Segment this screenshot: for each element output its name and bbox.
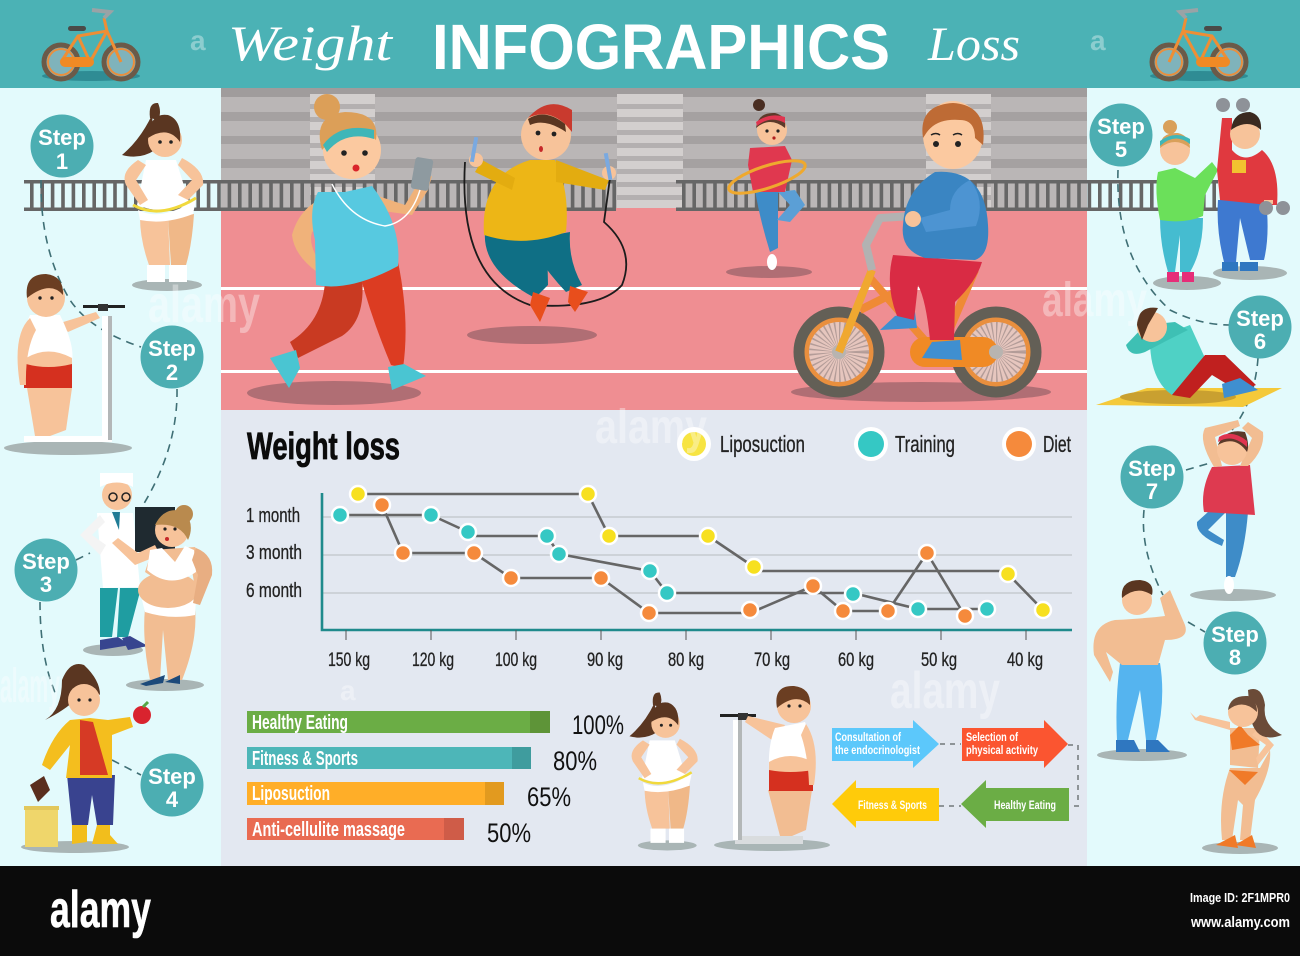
chart x-axis labels: 90 kg	[587, 650, 623, 671]
bar: fitness and sports: Fitness & Sports	[252, 748, 358, 770]
chart x-axis labels: 80 kg	[668, 650, 704, 671]
step 4 badge	[140, 754, 204, 816]
figure: man doing sit-ups	[1096, 308, 1282, 407]
running track	[221, 208, 1087, 410]
bar: fitness and sports: 80%	[553, 746, 597, 776]
chart legend: Liposuction	[720, 431, 805, 457]
header band	[0, 0, 1300, 88]
arrow: selection of physical activity: physical activity	[966, 743, 1038, 757]
line chart: weight over time	[322, 486, 1072, 640]
left side panel	[0, 88, 221, 866]
stock watermarks: alamy	[595, 401, 707, 454]
title: Weight: Weight	[228, 15, 393, 71]
chart x-axis labels: 100 kg	[495, 650, 537, 671]
bar: anti-cellulite massage: Anti-cellulite massage	[252, 819, 405, 841]
figure: woman measuring waist, small	[629, 692, 698, 850]
bar: liposuction: Liposuction	[252, 783, 330, 805]
figure: woman with hula hoop	[726, 99, 812, 278]
series: diet	[374, 497, 973, 624]
icon: bicycle left	[42, 10, 140, 81]
step 2 badge	[140, 326, 204, 388]
figure: boy riding bicycle	[791, 101, 1051, 402]
stock watermarks: alamy	[890, 662, 1000, 720]
step 6 badge: 6	[1254, 329, 1266, 354]
stock watermarks: a	[340, 675, 356, 706]
figure: woman stretching	[1190, 420, 1276, 601]
chart legend: Training	[895, 431, 955, 457]
fence left	[24, 180, 616, 211]
step 1 badge	[30, 114, 94, 178]
right side panel	[1087, 88, 1300, 866]
stadium stands background	[221, 88, 1087, 208]
step 4 badge: 4	[166, 787, 179, 812]
arrow: fitness and sports	[832, 780, 939, 828]
bar: healthy eating	[247, 710, 624, 740]
figure: boy skipping rope	[464, 104, 626, 344]
figure: muscular man	[1093, 580, 1187, 761]
icon: bicycle right	[1150, 10, 1248, 81]
step 6 badge: Step	[1236, 306, 1284, 331]
step 4 badge: Step	[148, 764, 196, 789]
chart panel background	[221, 410, 1087, 866]
dashed connectors between process arrows	[939, 744, 1078, 806]
step 5 badge: Step	[1097, 114, 1145, 139]
bar: liposuction	[247, 782, 571, 812]
step 1 badge: Step	[38, 125, 86, 150]
stock watermarks: alamy	[1042, 274, 1147, 327]
arrow: selection of physical activity: Selection of	[966, 730, 1019, 744]
chart x-axis labels: 40 kg	[1007, 650, 1043, 671]
step 7 badge: 7	[1146, 479, 1158, 504]
stock watermarks: alamy	[148, 276, 260, 334]
arrow: consultation of the endocrinologist	[832, 720, 939, 768]
chart y-axis labels: 3 month	[246, 542, 302, 564]
chart heading: Weight loss	[247, 426, 400, 468]
figure: woman measuring waist	[122, 103, 203, 291]
step 1 badge: 1	[56, 149, 68, 174]
chart legend: Diet	[1043, 431, 1071, 457]
step 3 badge	[14, 538, 78, 602]
step 3 badge: 3	[40, 572, 52, 597]
step 7 badge: Step	[1128, 456, 1176, 481]
step 8 badge: 8	[1229, 645, 1241, 670]
chart legend	[677, 427, 1071, 461]
title: INFOGRAPHICS: INFOGRAPHICS	[432, 11, 890, 83]
dashed path connecting left steps	[40, 180, 177, 775]
step 7 badge	[1120, 446, 1184, 508]
figure: woman running with phone	[247, 94, 434, 405]
chart x-axis labels: 120 kg	[412, 650, 454, 671]
fence right	[676, 180, 1218, 211]
figure: doctor with X-ray	[80, 473, 175, 656]
chart x-axis labels	[328, 650, 1043, 671]
figure: couple exercising, man with dumbbells	[1213, 98, 1290, 280]
step 2 badge: Step	[148, 336, 196, 361]
title: Loss: Loss	[927, 18, 1020, 71]
arrow: fitness and sports: Fitness & Sports	[858, 798, 927, 812]
bar: liposuction: 65%	[527, 782, 571, 812]
figure: couple exercising, woman	[1153, 120, 1221, 290]
chart x-axis labels: 60 kg	[838, 650, 874, 671]
step 8 badge: Step	[1211, 622, 1259, 647]
figure: boy on weighing scale	[4, 274, 132, 455]
chart y-axis labels	[246, 505, 302, 602]
stock watermarks: a	[1090, 25, 1106, 56]
chart y-axis labels: 6 month	[246, 580, 302, 602]
arrow: selection of physical activity	[962, 720, 1068, 768]
series: liposuction	[350, 486, 1051, 618]
chart y-axis labels: 1 month	[246, 505, 300, 527]
chart x-axis labels: 50 kg	[921, 650, 957, 671]
bar: healthy eating: Healthy Eating	[252, 712, 348, 734]
bar: fitness and sports	[247, 746, 597, 776]
figure: overweight woman with doctor	[126, 505, 212, 691]
footer band	[0, 866, 1300, 956]
figure: woman choosing apple	[21, 664, 151, 853]
chart x-axis labels: 150 kg	[328, 650, 370, 671]
dashed path connecting right steps	[1118, 170, 1258, 632]
chart x-axis labels: 70 kg	[754, 650, 790, 671]
arrow: consultation of the endocrinologist: the endocrinologist	[835, 743, 920, 757]
arrow: healthy eating	[961, 780, 1069, 828]
step 6 badge	[1228, 296, 1292, 358]
footer logo: alamy	[50, 881, 151, 939]
step 3 badge: Step	[22, 549, 70, 574]
step 5 badge	[1090, 104, 1152, 166]
bar: anti-cellulite massage	[247, 818, 531, 848]
stock watermarks: alamy	[0, 660, 60, 713]
figure: boy on weighing scale, centre	[714, 686, 830, 851]
arrow: healthy eating: Healthy Eating	[994, 798, 1056, 812]
stock watermarks: a	[190, 25, 206, 56]
bar: anti-cellulite massage: 50%	[487, 818, 531, 848]
step 5 badge: 5	[1115, 137, 1127, 162]
series: training	[332, 507, 995, 617]
step 2 badge: 2	[166, 360, 178, 385]
stock watermarks	[0, 25, 1147, 720]
step 8 badge	[1204, 612, 1266, 674]
figure: slim woman in bikini	[1190, 689, 1282, 854]
bar: healthy eating: 100%	[572, 710, 624, 740]
arrow: consultation of the endocrinologist: Consultation of	[835, 730, 902, 744]
